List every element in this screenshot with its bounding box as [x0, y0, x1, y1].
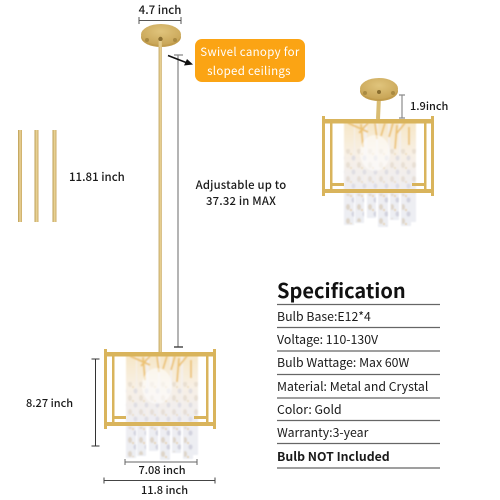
label: rod length: 11.81 inch: [69, 169, 125, 185]
row: bulb note: Bulb NOT Included: [277, 447, 390, 465]
arrow to callout: [168, 56, 193, 66]
callout: swivel canopy: [195, 39, 305, 82]
heading: Specification: [277, 275, 406, 304]
canopy: [360, 78, 398, 101]
swivel lamp: [322, 78, 434, 227]
label: adjustable length: [196, 177, 286, 209]
label: adjustable length: 37.32 in MAX: [206, 193, 276, 209]
dimension: lamp height: 8.27 inch: [26, 395, 73, 411]
ceiling canopy: [141, 24, 181, 47]
specification table: [277, 275, 440, 468]
dimension: frame width: [104, 478, 215, 498]
dimension: crystal width: [125, 459, 197, 478]
dimension: adjustable height bar: [174, 55, 183, 347]
label: adjustable length: Adjustable up to: [196, 177, 286, 193]
row: voltage: Voltage: 110-130V: [277, 330, 379, 348]
main pendant lamp: [104, 24, 216, 460]
lamp frame and crystals: [104, 349, 216, 460]
dimension: canopy width: 4.7 inch: [139, 2, 181, 18]
row: color: Color: Gold: [277, 400, 342, 418]
row: bulb base: Bulb Base:E12*4: [277, 307, 371, 325]
row: warranty: Warranty:3-year: [277, 423, 369, 441]
row: wattage: Bulb Wattage: Max 60W: [277, 353, 410, 371]
dimension: frame width: 11.8 inch: [141, 482, 188, 498]
hanging rod: [159, 42, 162, 353]
stem: [378, 96, 379, 119]
callout: swivel canopy: Swivel canopy for: [200, 44, 300, 60]
dimension: lamp height: [26, 359, 100, 446]
dimension: crystal width: 7.08 inch: [138, 462, 186, 478]
spare rods: [18, 130, 56, 222]
frame and crystals: [322, 116, 434, 227]
callout: swivel canopy: sloped ceilings: [207, 63, 291, 79]
row: material: Material: Metal and Crystal: [277, 377, 428, 395]
dimension: swivel height: 1.9inch: [410, 98, 448, 114]
dimension: swivel height: [399, 95, 448, 118]
